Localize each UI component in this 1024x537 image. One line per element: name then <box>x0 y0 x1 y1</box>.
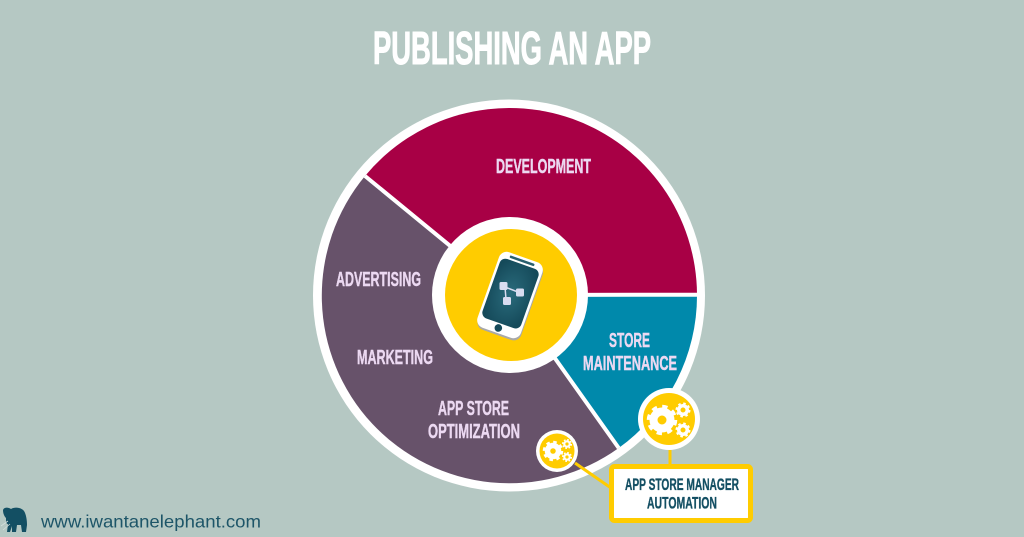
label: store maintenance: STORE <box>609 330 650 352</box>
segment: store maintenance <box>510 295 697 448</box>
icon: smartphone <box>474 250 546 343</box>
connector: small gear to box <box>575 463 611 488</box>
title: PUBLISHING AN APP <box>373 22 651 74</box>
center hub with phone icon <box>432 217 588 373</box>
segment: development <box>365 108 697 295</box>
outer white ring <box>313 100 705 492</box>
label: store maintenance <box>583 330 677 375</box>
label: marketing: MARKETING <box>357 347 433 369</box>
label: development: DEVELOPMENT <box>496 156 591 178</box>
icon: elephant logo <box>1 508 27 532</box>
label: app store optimization: APP STORE <box>438 398 509 420</box>
label: store maintenance: MAINTENANCE <box>583 353 677 375</box>
label: app store optimization <box>428 398 520 443</box>
website url: www.iwantanelephant.com <box>40 512 261 532</box>
callout: app store manager automation <box>612 466 750 520</box>
callout: app store manager automation: AUTOMATION <box>647 494 717 512</box>
icon: flow nodes <box>500 282 524 305</box>
icon: small gears badge <box>536 430 578 472</box>
callout: app store manager automation: APP STORE MANAGER <box>625 476 739 494</box>
connector: large gear to box <box>668 450 672 466</box>
donut chart <box>313 100 705 492</box>
label: advertising: ADVERTISING <box>336 269 421 291</box>
segment: marketing <box>322 176 619 483</box>
label: app store optimization: OPTIMIZATION <box>428 421 520 443</box>
icon: large gears badge <box>638 388 700 450</box>
segment separators <box>365 176 697 448</box>
